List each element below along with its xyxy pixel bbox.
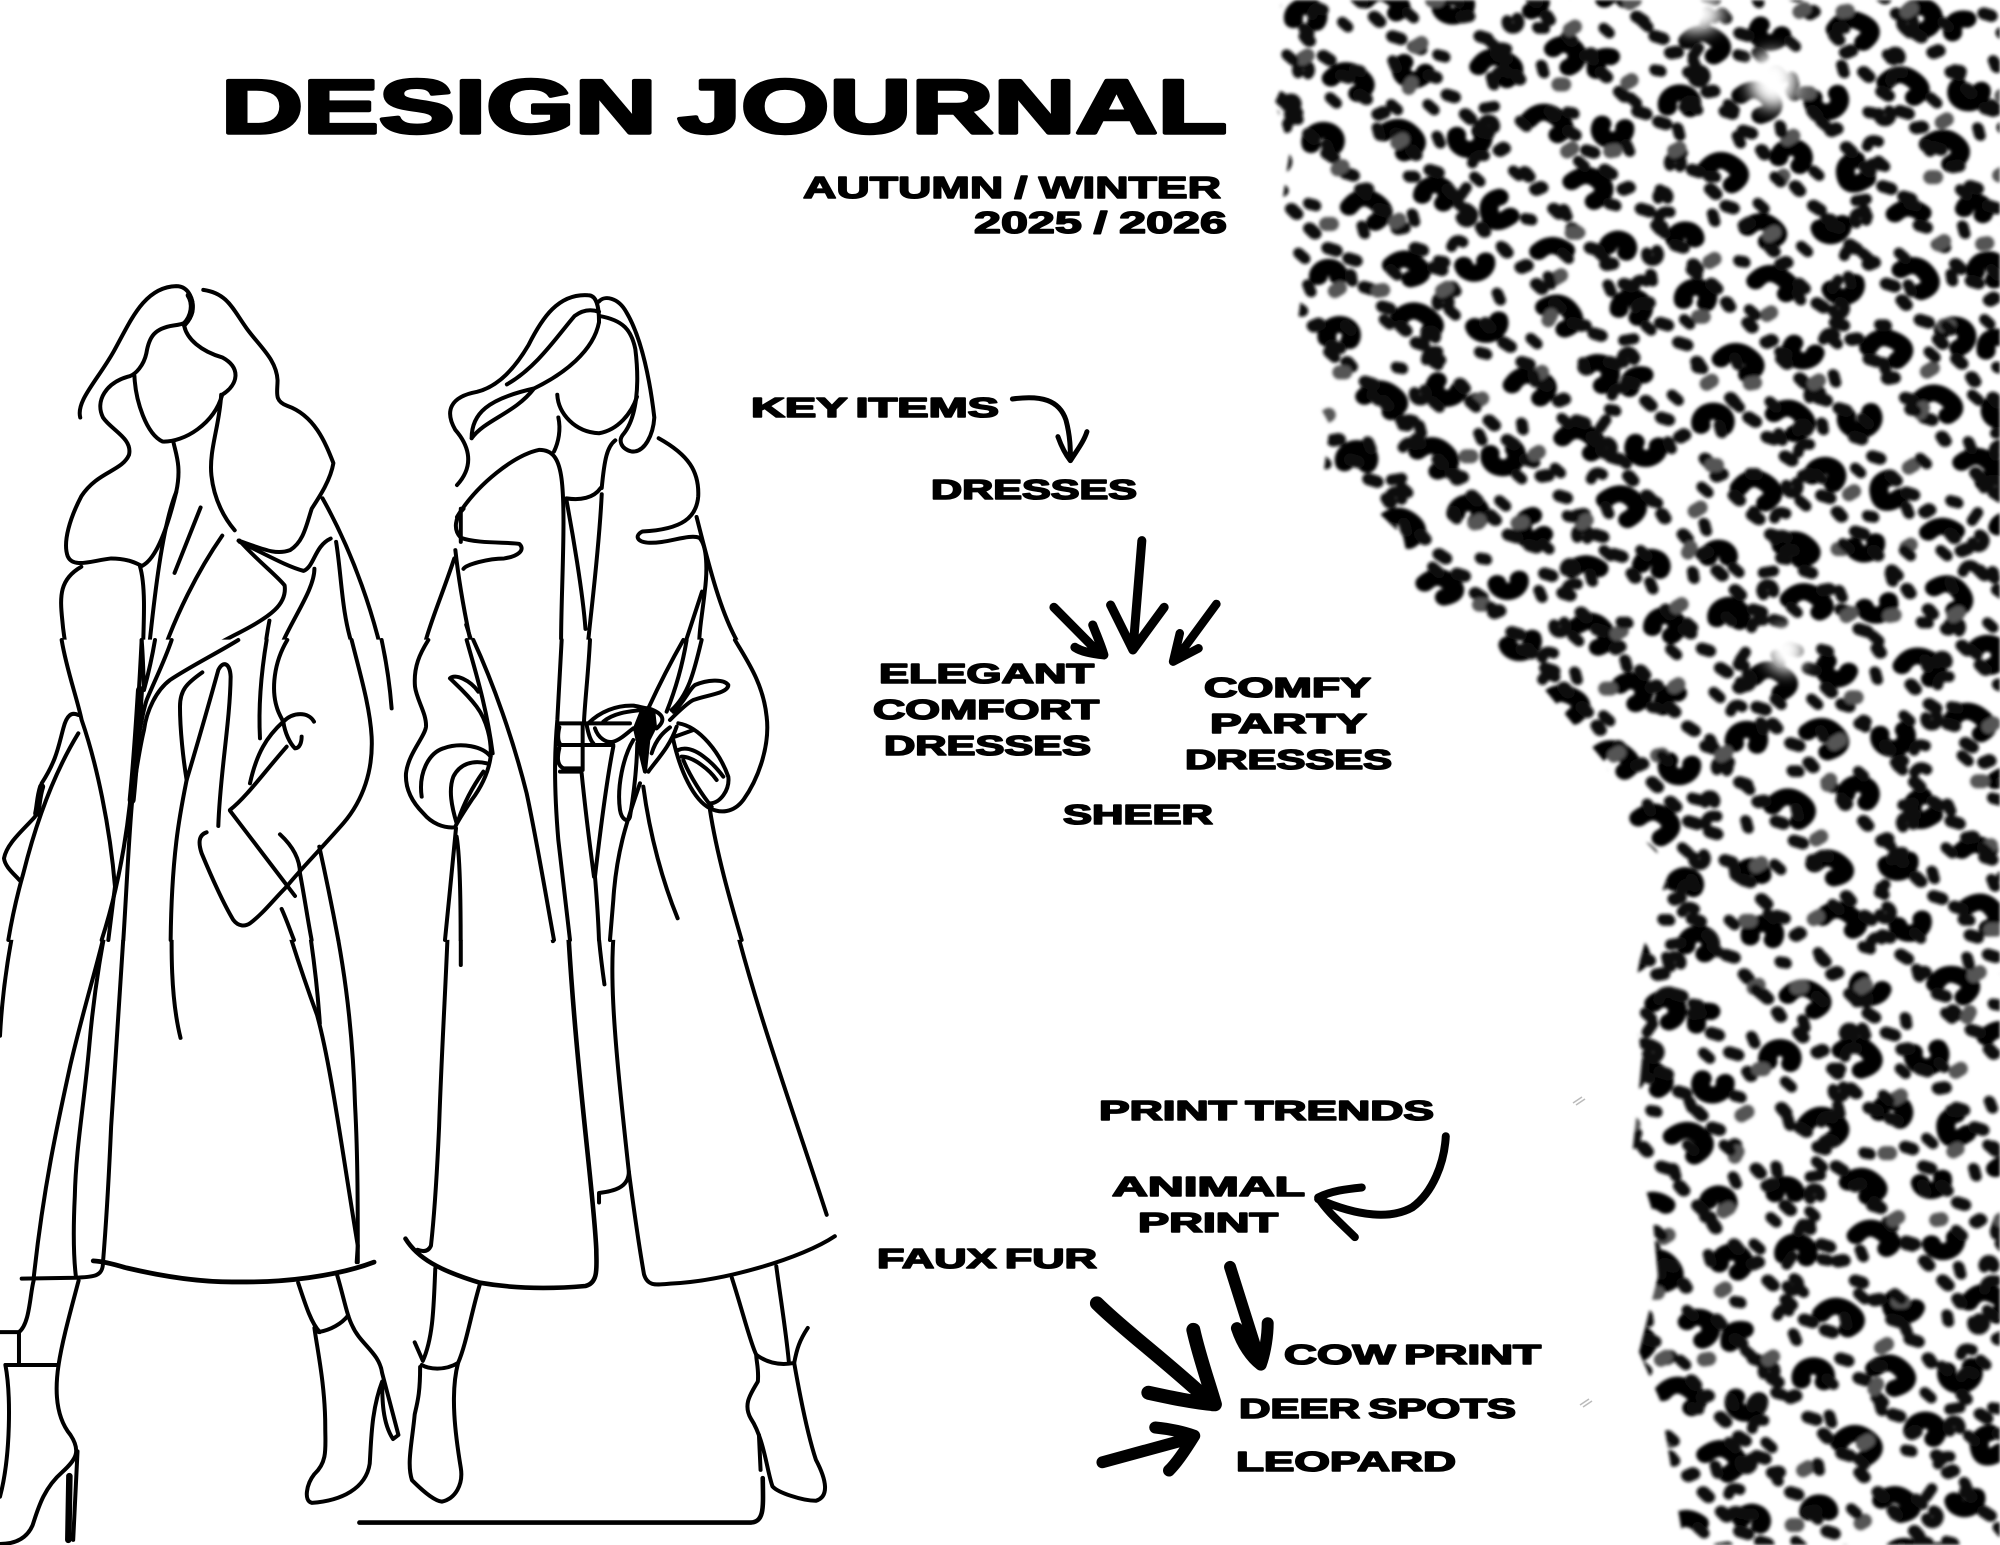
label: sheer: SHEER [1063,799,1213,830]
watermark specks [1573,1097,1592,1407]
fashion figure: right model in belted coat [359,295,835,1523]
heading: print trends: PRINT TRENDS [1099,1095,1434,1126]
arrows: three arrows to dress types [1054,541,1216,662]
label: deer spots: DEER SPOTS [1239,1393,1516,1424]
section: print trends [877,1095,1541,1477]
heading: key items: KEY ITEMS [751,392,999,423]
label: elegant comfort dresses: COMFORT [873,694,1099,725]
label: dresses: DRESSES [931,474,1137,505]
label: comfy party dresses [1185,672,1392,775]
arrow: large diagonal to deer spots [1097,1303,1215,1404]
label: leopard: LEOPARD [1236,1446,1456,1477]
label: elegant comfort dresses [873,658,1099,761]
label: cow print: COW PRINT [1284,1339,1541,1370]
left coat waist and pocket detail [4,640,392,940]
label: animal print: ANIMAL [1112,1171,1305,1202]
title: DESIGN JOURNAL [221,65,1227,150]
label: elegant comfort dresses: ELEGANT [879,658,1094,689]
leopard print texture panel [1250,0,2000,1545]
label: comfy party dresses: PARTY [1210,708,1368,739]
label: animal print [1112,1171,1305,1238]
label: animal print: PRINT [1138,1207,1278,1238]
arrow: small to leopard [1102,1427,1194,1471]
subtitle: season: 2025 / 2026 [974,205,1227,240]
label: elegant comfort dresses: DRESSES [884,730,1091,761]
label: faux fur: FAUX FUR [877,1243,1097,1274]
arrow: key items to dresses [1012,398,1087,461]
section: key items [751,392,1392,830]
subtitle: season: AUTUMN / WINTER [803,170,1221,205]
right coat belt, tie and cuffs [406,640,767,940]
subtitle: season [803,170,1227,240]
arrow: down to cow print [1230,1267,1268,1365]
label: comfy party dresses: DRESSES [1185,744,1392,775]
label: comfy party dresses: COMFY [1204,672,1372,703]
arrow: print trends to animal print [1318,1136,1446,1237]
fashion figure: left model in coat [0,286,398,1544]
